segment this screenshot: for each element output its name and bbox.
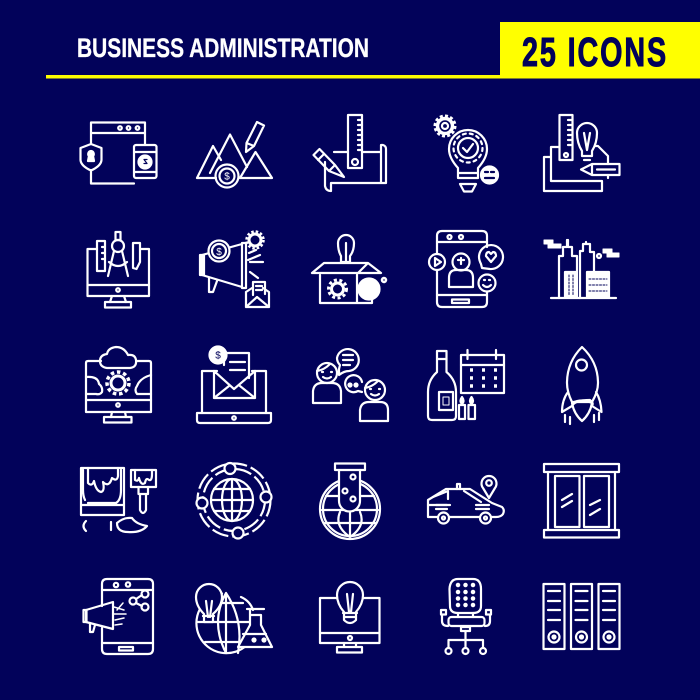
title: BUSINESS ADMINISTRATION [77,33,369,63]
icon: test tube over globe [320,464,380,539]
icon: browser security [80,122,156,184]
header rule [46,75,502,78]
icon: ruler, bulb, document and pencil [544,115,620,191]
icon: two people talking [313,349,388,421]
icon: globe, bulb and flask [196,584,272,653]
icon: laptop with mail [197,346,271,423]
icon: rocket [562,347,602,424]
badge text: 25 ICONS [522,30,666,75]
icon: smartphone with social bubbles [429,231,503,307]
icon: ruler, pencil and blueprint [314,115,386,191]
icon: mountains, coin and pencil: $ [224,172,230,182]
icon: smartphone promotion [84,579,153,654]
icon: city skyline [544,240,619,298]
icon: product box with bulb [312,235,386,303]
icon: globe network [196,463,272,538]
icon: mountains, coin and pencil [197,122,272,188]
icon: binders [544,584,620,649]
icon: bottle, calendar and candles [428,350,504,420]
icon: laptop with mail: $ [215,350,221,362]
icon: paint bucket and brush [81,468,156,532]
icon: idea bulb with gear [435,116,498,192]
yellow badge [500,22,700,78]
icon: monitor with cloud and gear [86,347,151,422]
icon: taxi and location pin [428,476,504,524]
icon: window [544,464,619,538]
icon: megaphone marketing [200,232,269,307]
icon: megaphone marketing: $ [216,247,222,258]
icon: monitor with light bulb [320,582,380,652]
icon: office chair [441,579,491,654]
icon: monitor with drafting tools [88,232,149,308]
